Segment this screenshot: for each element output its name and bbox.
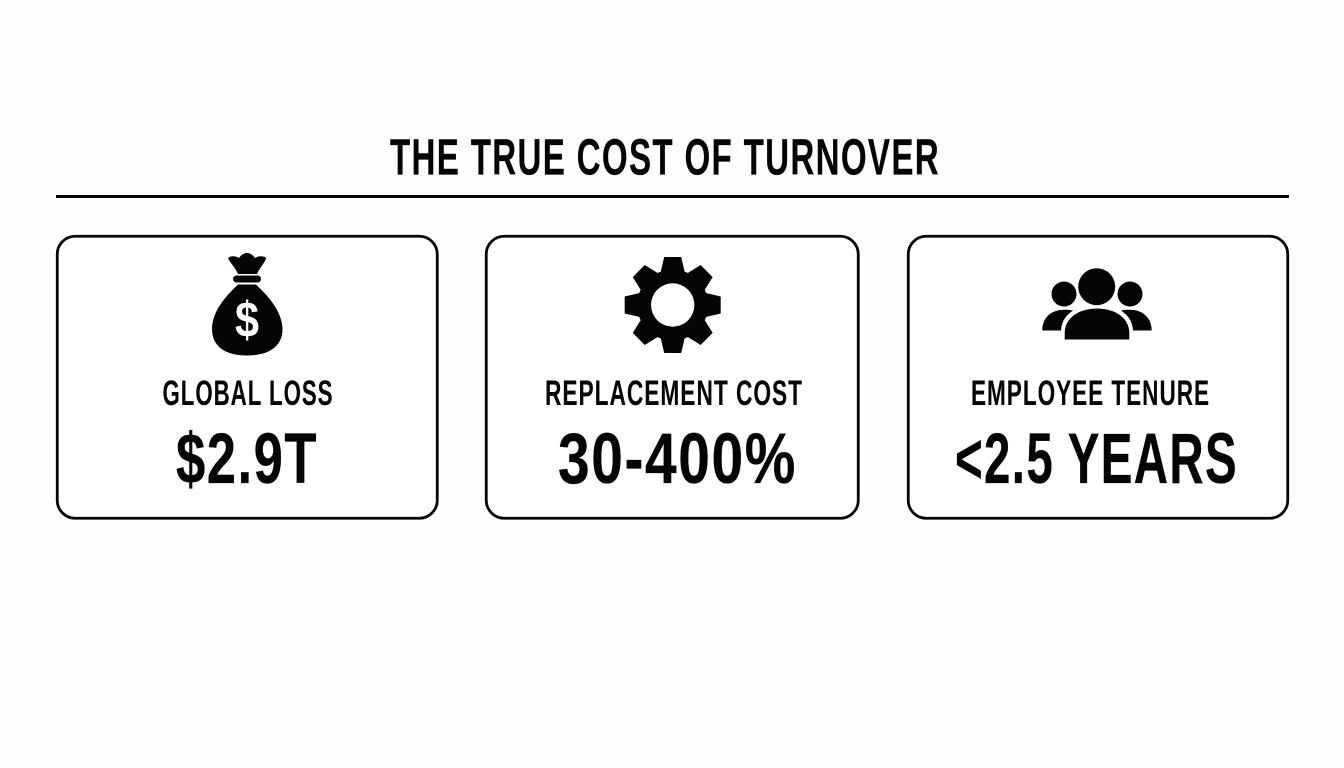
- label: global loss: GLOBAL LOSS: [162, 374, 334, 413]
- icon: gear: [625, 257, 721, 353]
- value: 30-400%: 30-400%: [558, 420, 797, 499]
- panel: employee tenure: [908, 236, 1288, 518]
- label: replacement cost: REPLACEMENT COST: [545, 374, 803, 413]
- icon: people: [1042, 268, 1152, 340]
- icon: money bag: [212, 253, 282, 356]
- panel: replacement cost: [486, 236, 858, 518]
- icon: money bag: $: [235, 292, 259, 348]
- panel: global loss: [57, 236, 437, 518]
- label: employee tenure: EMPLOYEE TENURE: [971, 374, 1210, 413]
- title: THE TRUE COST OF TURNOVER: [390, 128, 940, 186]
- value: $2.9T: $2.9T: [176, 420, 318, 499]
